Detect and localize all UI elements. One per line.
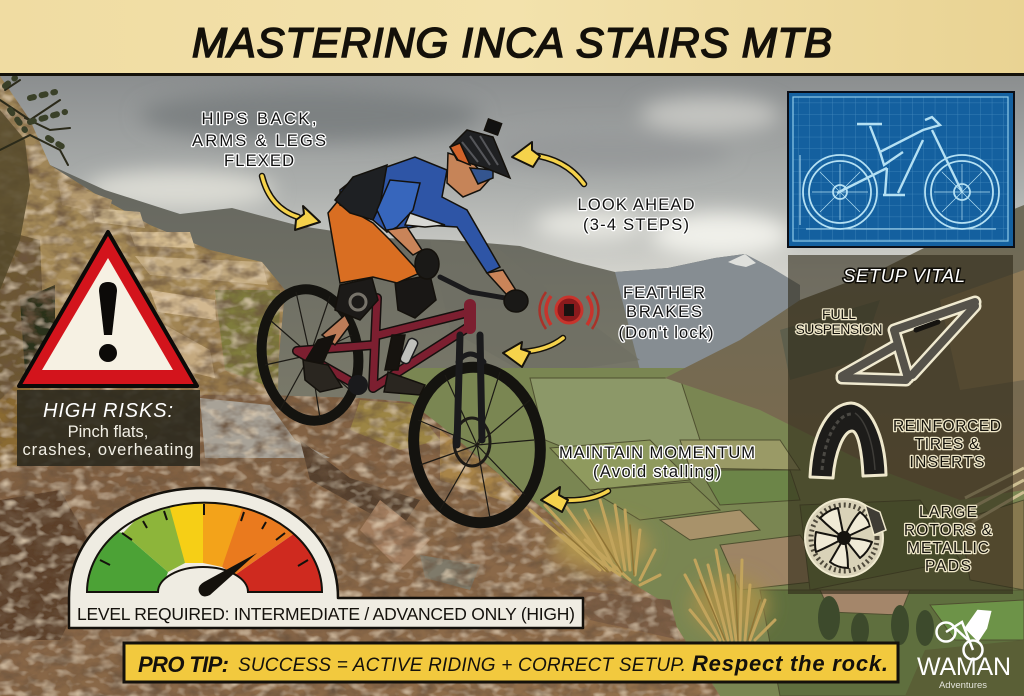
gauge needle [199, 553, 257, 596]
orange shorts [328, 202, 420, 283]
title banner [0, 0, 1024, 76]
high risks box: Pinch flats, [68, 423, 148, 441]
label: reinforced tires: REINFORCED [893, 418, 1001, 435]
blue jersey [335, 157, 500, 273]
label: large rotors: ROTORS & [904, 522, 993, 539]
background: bush upper left [0, 78, 70, 290]
logo: Waman Adventures: WAMAN [917, 653, 1011, 681]
callout: feather brakes [618, 284, 714, 342]
logo bike icon [936, 611, 990, 660]
icon: suspension frame [842, 302, 975, 380]
label: reinforced tires: INSERTS [910, 454, 984, 471]
high risks box: HIGH RISKS: [43, 400, 173, 422]
callout: maintain momentum: MAINTAIN MOMENTUM [559, 444, 755, 462]
blueprint panel [788, 92, 1014, 247]
panel: setup vital [788, 255, 1013, 594]
logo: Waman Adventures: Adventures [939, 680, 987, 691]
label: full suspension [796, 306, 882, 337]
label: large rotors [904, 504, 993, 575]
gauge label: LEVEL REQUIRED: INTERMEDIATE / ADVANCED ONLY (HIGH) [77, 604, 575, 624]
background: golden grass tufts [530, 500, 775, 640]
label: large rotors: LARGE [919, 504, 977, 521]
background: distant mountains [0, 165, 800, 420]
high risks box [17, 390, 200, 466]
mountain biker on red bike [253, 119, 550, 531]
callout: look ahead: LOOK AHEAD [578, 196, 695, 214]
callout: feather brakes: (Don't lock) [618, 324, 714, 342]
background: foreground trail slope [0, 395, 720, 696]
exclamation mark [99, 282, 117, 362]
callout: maintain momentum [559, 444, 755, 481]
warning triangle [19, 232, 197, 386]
icon: brake rotor [805, 499, 886, 577]
callout: hips back: HIPS BACK, [202, 110, 316, 128]
background: right mountain slope [665, 205, 1024, 522]
icon: brake warning [540, 292, 598, 329]
panel heading: SETUP VITAL [843, 265, 965, 286]
difficulty gauge [60, 488, 583, 628]
frame [297, 298, 470, 388]
rear wheel [253, 283, 367, 427]
label: full suspension: FULL [822, 306, 856, 322]
title text: MASTERING INCA STAIRS MTB [192, 19, 832, 66]
background: bottom right trees [818, 596, 1024, 696]
logo: Waman Adventures [917, 611, 1011, 691]
gauge colour arc [88, 504, 321, 591]
arrow: to hips [262, 176, 320, 230]
callout: hips back [192, 110, 326, 170]
pro tip banner [124, 643, 898, 682]
background: valley fields [400, 368, 1024, 696]
pro tip banner: SUCCESS = ACTIVE RIDING + CORRECT SETUP. [238, 655, 686, 676]
pro tip banner: PRO TIP: [138, 652, 229, 677]
callout: hips back: ARMS & LEGS [192, 132, 326, 150]
pro tip banner: Respect the rock. [692, 651, 888, 676]
head and helmet [447, 119, 510, 197]
callout: look ahead [578, 196, 695, 234]
blueprint bike [800, 117, 999, 229]
callout: hips back: FLEXED [224, 152, 294, 170]
label: large rotors: METALLIC [907, 540, 989, 557]
fork and handlebar [349, 277, 517, 445]
background: left rock stairs [0, 76, 285, 520]
label: reinforced tires [893, 418, 1001, 471]
front wheel [404, 359, 550, 531]
arrow: to brake lever [503, 338, 563, 367]
arrow: to head [512, 142, 584, 184]
legs [303, 275, 436, 395]
callout: look ahead: (3-4 STEPS) [583, 216, 689, 234]
arrow: to front wheel [541, 487, 608, 512]
callout: feather brakes: FEATHER [623, 284, 705, 302]
icon: tire [810, 403, 886, 478]
label: full suspension: SUSPENSION [796, 321, 882, 337]
arms [387, 227, 528, 312]
background: cloudy sky [0, 76, 1024, 396]
high risks box: crashes, overheating [22, 441, 194, 459]
callout: maintain momentum: (Avoid stalling) [593, 463, 721, 481]
label: large rotors: PADS [925, 558, 971, 575]
callout: feather brakes: BRAKES [626, 303, 702, 321]
label: reinforced tires: TIRES & [914, 436, 980, 453]
